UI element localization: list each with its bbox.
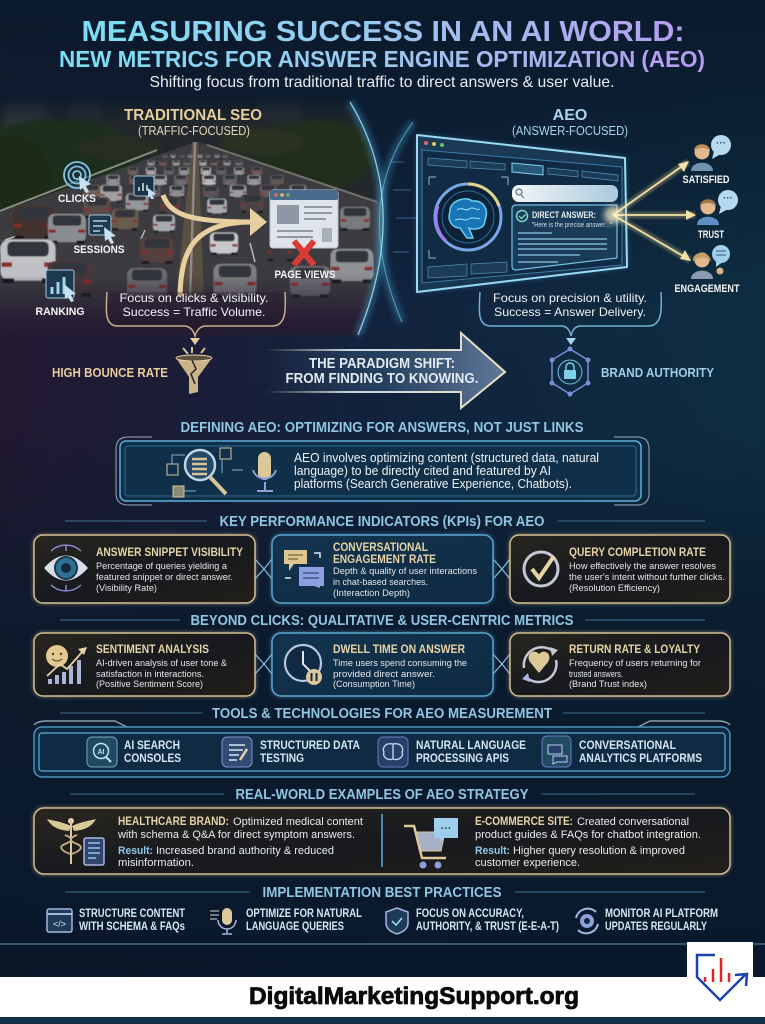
panel: traditional SEO highway photo — [0, 104, 382, 335]
card: sentiment analysis: satisfaction in interactions. — [96, 669, 204, 680]
card: return rate and loyalty: RETURN RATE & LOYALTY — [569, 644, 700, 656]
tool: conversational analytics: ANALYTICS PLATFORMS — [579, 753, 702, 765]
panel: AEO browser screen — [417, 135, 627, 292]
tool: NLP APIs: NATURAL LANGUAGE — [416, 740, 526, 752]
card: return rate and loyalty: trusted answers. — [569, 669, 623, 680]
example: healthcare brand: HEALTHCARE BRAND: — [118, 816, 229, 828]
card: sentiment analysis — [34, 633, 255, 696]
connectors: metric cards — [255, 654, 510, 674]
icon: clicks: CLICKS — [58, 193, 96, 205]
title: NEW METRICS FOR ANSWER ENGINE OPTIMIZATION (AEO) — [59, 46, 705, 72]
example: healthcare brand — [117, 816, 363, 869]
card: conversational engagement rate: CONVERSATIONAL — [333, 542, 428, 554]
icon: shopping cart with chat: ··· — [440, 823, 452, 835]
subtitle: Shifting focus from traditional traffic to direct answers & user value. — [150, 74, 614, 91]
arrows: answer rays to outcomes — [604, 161, 696, 261]
icon: eye — [44, 545, 88, 591]
icon: clock with pause — [285, 645, 322, 685]
card: dwell time on answer: provided direct answer. — [333, 669, 435, 680]
icon: caduceus and tablet — [47, 818, 104, 865]
practice: structure content: WITH SCHEMA & FAQs — [79, 921, 185, 933]
logo — [687, 942, 753, 1017]
icon: brand authority lock — [550, 346, 590, 396]
tool: conversational analytics — [542, 736, 702, 767]
example: healthcare brand: Optimized medical content — [233, 816, 363, 828]
callout: AEO focus — [479, 291, 661, 345]
icon: engagement user: ENGAGEMENT — [674, 283, 740, 295]
card: dwell time on answer: Time users spend consuming the — [333, 658, 467, 669]
connectors: KPI cards — [255, 559, 510, 579]
icon: sessions: SESSIONS — [74, 244, 124, 256]
tool: structured data testing: TESTING — [260, 753, 304, 765]
example: healthcare brand: misinformation. — [118, 857, 194, 869]
direct answer box: "Here is the precise answer..." — [532, 220, 612, 229]
example: healthcare brand: Increased brand authority & reduced — [156, 845, 334, 857]
title: MEASURING SUCCESS IN AN AI WORLD: — [82, 16, 684, 48]
heading: real-world examples: REAL-WORLD EXAMPLES OF AEO STRATEGY — [236, 787, 529, 803]
tool: AI search consoles: AI — [98, 749, 105, 756]
callout: SEO focus: Focus on clicks & visibility. — [120, 291, 268, 305]
card: sentiment analysis: SENTIMENT ANALYSIS — [96, 644, 209, 656]
panel: tools — [34, 721, 730, 777]
definition text: AEO involves optimizing content (structured data, natural — [294, 450, 599, 465]
card: answer snippet visibility: ANSWER SNIPPET VISIBILITY — [96, 547, 243, 559]
heading: beyond clicks: BEYOND CLICKS: QUALITATIVE & USER-CENTRIC METRICS — [190, 613, 574, 629]
label: high bounce rate: HIGH BOUNCE RATE — [52, 365, 168, 380]
example: e-commerce site — [475, 816, 701, 869]
card: conversational engagement rate — [272, 535, 493, 603]
arrow: paradigm shift — [265, 333, 505, 408]
panel: real-world examples — [34, 808, 730, 874]
title — [59, 16, 705, 72]
card: conversational engagement rate: in chat-based searches. — [333, 577, 428, 588]
icon: trust user: TRUST — [698, 229, 724, 241]
tool: NLP APIs — [378, 737, 526, 767]
direct answer box: DIRECT ANSWER: — [532, 210, 596, 221]
card: conversational engagement rate: Depth & quality of user interactions — [333, 566, 477, 577]
card: query completion rate — [510, 535, 730, 603]
card: conversational engagement rate: ENGAGEMENT RATE — [333, 554, 436, 566]
callout: SEO focus — [106, 291, 285, 345]
definition text: platforms (Search Generative Experience, Chatbots). — [294, 476, 572, 491]
icon: satisfied user: ··· — [716, 138, 726, 149]
icon: cracked funnel — [176, 347, 212, 394]
icon: page views window: PAGE VIEWS — [274, 269, 336, 281]
callout: SEO focus: Success = Traffic Volume. — [122, 305, 266, 319]
tool: AI search consoles — [87, 737, 181, 767]
heading: tools: TOOLS & TECHNOLOGIES FOR AEO MEASUREMENT — [212, 706, 552, 722]
card: dwell time on answer: (Consumption Time) — [333, 679, 415, 690]
definition text — [294, 450, 599, 491]
heading: AEO: (ANSWER-FOCUSED) — [512, 124, 628, 138]
heading: AEO — [512, 107, 628, 138]
practice: accuracy and trust: AUTHORITY, & TRUST (E-E-A-T) — [416, 921, 559, 933]
card: sentiment analysis: (Positive Sentiment Score) — [96, 679, 203, 690]
icon: page views window — [270, 190, 338, 281]
tool: AI search consoles: CONSOLES — [124, 753, 181, 765]
icon: smiley with growth chart — [46, 645, 87, 684]
icon: shopping cart with chat — [404, 818, 458, 868]
icon: satisfied user: SATISFIED — [682, 174, 730, 186]
icon: sessions — [74, 215, 124, 256]
icon: trust user — [697, 190, 738, 241]
heading: implementation best practices: IMPLEMENTATION BEST PRACTICES — [262, 885, 502, 901]
arrow: traffic to page views — [163, 195, 267, 296]
card: query completion rate: QUERY COMPLETION RATE — [569, 547, 706, 559]
card: answer snippet visibility: featured snippet or direct answer. — [96, 572, 233, 583]
portal light divider — [350, 102, 416, 335]
practice: natural language — [210, 908, 362, 934]
panel: defining AEO — [116, 437, 649, 505]
icon: check circle — [524, 552, 558, 586]
example: e-commerce site: product guides & FAQs for chatbot integration. — [475, 829, 701, 841]
heading: KPIs: KEY PERFORMANCE INDICATORS (KPIs) FOR AEO — [220, 514, 544, 530]
icon: ranking — [36, 270, 84, 318]
practice: monitor updates: MONITOR AI PLATFORM — [605, 908, 718, 920]
heading: traditional SEO: (TRAFFIC-FOCUSED) — [138, 124, 250, 138]
example: e-commerce site: Higher query resolution & improved — [513, 845, 685, 857]
heading: traditional SEO: TRADITIONAL SEO — [124, 107, 262, 124]
card: dwell time on answer — [272, 633, 493, 696]
icon: magnifier over content — [167, 448, 243, 497]
example: healthcare brand: Result: — [118, 845, 153, 857]
card: sentiment analysis: AI-driven analysis of user tone & — [96, 658, 228, 669]
arrow: paradigm shift: FROM FINDING TO KNOWING. — [286, 371, 478, 387]
icon: trust user: ··· — [723, 193, 733, 204]
card: query completion rate: How effectively the answer resolves — [569, 561, 716, 572]
card: answer snippet visibility: (Visibility Rate) — [96, 583, 157, 594]
example: e-commerce site: E-COMMERCE SITE: — [475, 816, 573, 828]
heading: traditional SEO — [124, 107, 262, 138]
tool: structured data testing — [222, 737, 360, 767]
icon: ranking: RANKING — [36, 306, 84, 318]
card: return rate and loyalty: Frequency of users returning for — [569, 658, 702, 669]
card: dwell time on answer: DWELL TIME ON ANSWER — [333, 644, 466, 656]
card: return rate and loyalty: (Brand Trust index) — [569, 679, 647, 690]
practice: structure content: </> — [53, 919, 66, 929]
tool: conversational analytics: CONVERSATIONAL — [579, 740, 676, 752]
tool: AI search consoles: AI SEARCH — [124, 740, 180, 752]
practice: accuracy and trust: FOCUS ON ACCURACY, — [416, 908, 524, 920]
callout: AEO focus: Success = Answer Delivery. — [494, 305, 646, 319]
example: e-commerce site: Created conversational — [577, 816, 689, 828]
direct answer box — [512, 205, 617, 270]
tool: NLP APIs: PROCESSING APIS — [416, 753, 509, 765]
icon: engagement user — [674, 245, 740, 295]
heading: defining AEO: DEFINING AEO: OPTIMIZING FOR ANSWERS, NOT JUST LINKS — [180, 420, 584, 436]
icon: dashboard cursor — [134, 176, 156, 199]
practice: monitor updates: UPDATES REGULARLY — [605, 921, 707, 933]
example: healthcare brand: with schema & Q&A for direct symptom answers. — [117, 829, 355, 841]
label: brand authority: BRAND AUTHORITY — [601, 365, 714, 380]
tool: structured data testing: STRUCTURED DATA — [260, 740, 360, 752]
callout: AEO focus: Focus on precision & utility. — [493, 291, 647, 305]
search bar — [512, 185, 618, 202]
icon: satisfied user — [682, 135, 731, 186]
practice: structure content — [47, 908, 185, 933]
card: query completion rate: the user's intent without further clicks. — [569, 572, 725, 583]
footer band: DigitalMarketingSupport.org — [249, 983, 579, 1010]
practice: structure content: STRUCTURE CONTENT — [79, 908, 185, 920]
brain gauge — [429, 177, 508, 258]
icon: microphone — [253, 452, 276, 491]
practice: accuracy and trust — [386, 908, 559, 934]
card: query completion rate: (Resolution Efficiency) — [569, 583, 660, 594]
practice: natural language: OPTIMIZE FOR NATURAL — [246, 908, 362, 920]
card: answer snippet visibility — [34, 535, 255, 603]
practice: natural language: LANGUAGE QUERIES — [246, 921, 344, 933]
icon: heart with return arrows — [522, 647, 558, 682]
footer band — [0, 977, 765, 1024]
icon: chat bubbles — [284, 550, 324, 588]
icon: clicks — [58, 162, 96, 205]
practice: monitor updates — [576, 908, 718, 933]
card: conversational engagement rate: (Interaction Depth) — [333, 588, 410, 599]
arrow: paradigm shift: THE PARADIGM SHIFT: — [309, 356, 455, 372]
card: answer snippet visibility: Percentage of queries yielding a — [96, 561, 228, 572]
example: e-commerce site: Result: — [475, 845, 510, 857]
heading: AEO: AEO — [553, 107, 587, 124]
definition text: language) to be directly cited and featured by AI — [294, 463, 551, 478]
card: return rate and loyalty — [510, 633, 730, 696]
example: e-commerce site: customer experience. — [475, 857, 580, 869]
